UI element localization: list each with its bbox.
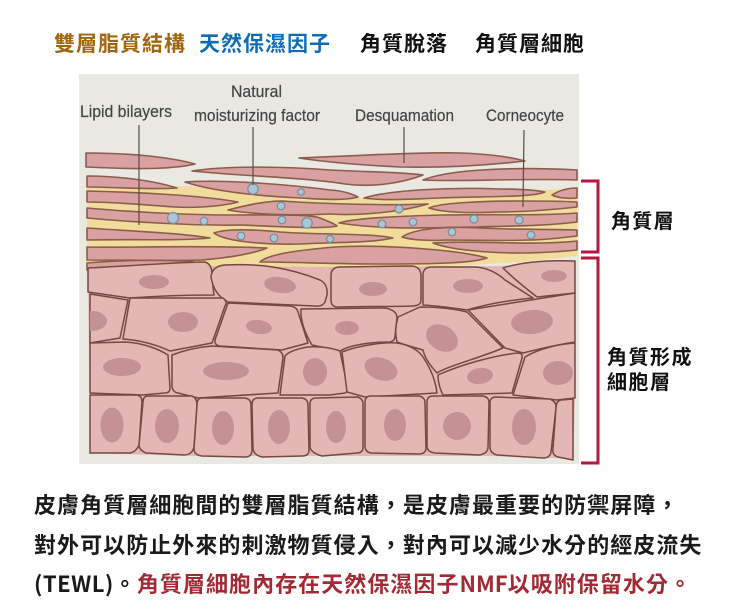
corneocytes — [86, 153, 577, 270]
cell nuclei — [90, 270, 573, 445]
cell layer base fill — [88, 261, 575, 459]
side label: keratinocyte layers: 細胞層 — [607, 366, 672, 395]
keratinocyte cells — [88, 261, 575, 460]
label: Natural moisturizing factor — [194, 82, 320, 125]
side label: stratum corneum: 角質層 — [611, 205, 675, 234]
label: Corneocyte: Corneocyte — [486, 106, 564, 125]
description text — [34, 488, 702, 599]
keratinocyte cell layers — [88, 261, 575, 460]
description text: 皮膚角質層細胞間的雙層脂質結構，是皮膚最重要的防禦屏障， — [34, 488, 679, 520]
legend term: lipid bilayers: 雙層脂質結構 — [54, 28, 186, 58]
natural moisturizing factor droplets — [168, 184, 535, 242]
legend: color-coded terms — [54, 28, 585, 58]
label: Lipid bilayers: Lipid bilayers — [80, 102, 172, 121]
side label: keratinocyte layers: 角質形成 — [607, 341, 693, 370]
legend term: desquamation: 角質脫落 — [360, 28, 448, 58]
bracket: keratinocyte layers — [581, 258, 598, 463]
leader lines from labels — [139, 125, 524, 225]
stratum corneum: lipid matrix and flattened corneocytes — [86, 153, 577, 270]
description text: (TEWL)。角質層細胞內存在天然保濕因子NMF以吸附保留水分。 — [34, 567, 692, 599]
label: Natural moisturizing factor: moisturizing factor — [194, 106, 320, 125]
label: Desquamation: Desquamation — [355, 106, 454, 125]
side label: keratinocyte layers — [607, 341, 693, 395]
legend term: corneocyte: 角質層細胞 — [475, 28, 585, 58]
label: Natural moisturizing factor: Natural — [231, 82, 282, 101]
description text: 對外可以防止外來的刺激物質侵入，對內可以減少水分的經皮流失 — [34, 528, 702, 560]
lipid matrix — [87, 186, 577, 270]
diagram background panel — [79, 74, 579, 464]
bracket: stratum corneum — [581, 181, 598, 252]
legend term: natural moisturizing factor: 天然保濕因子 — [199, 28, 331, 58]
